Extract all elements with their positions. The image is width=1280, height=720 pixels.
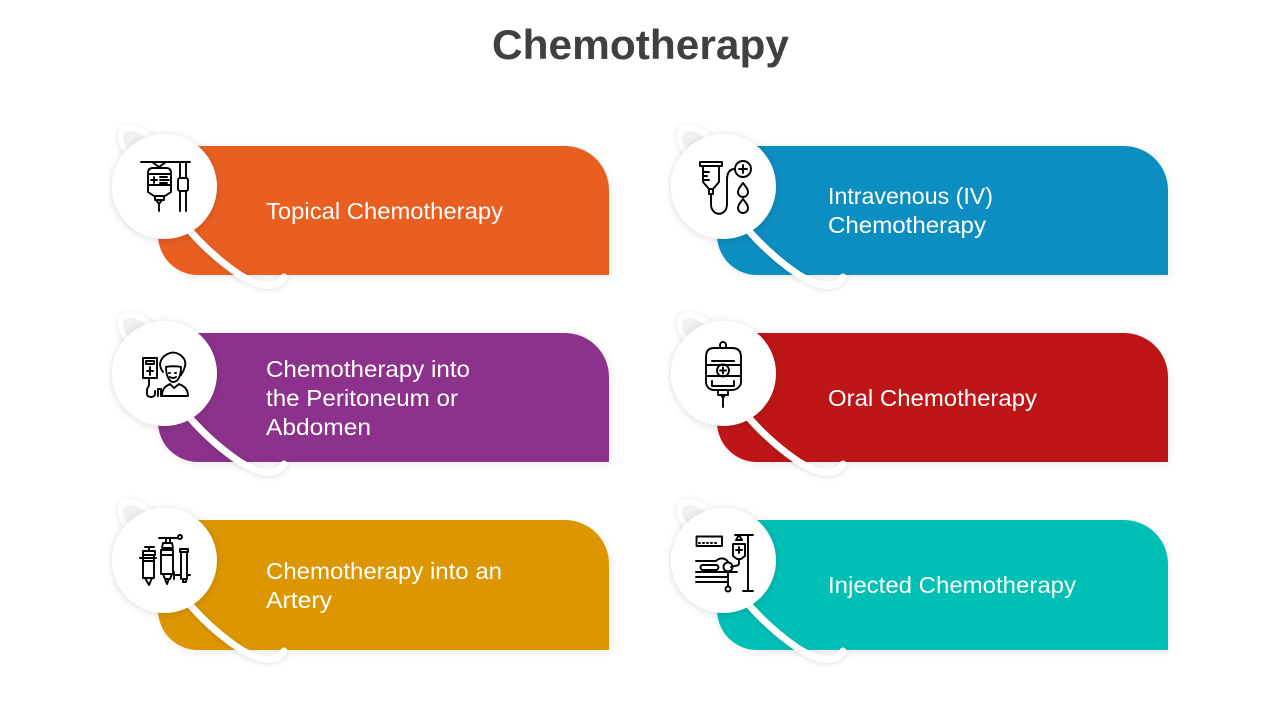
card background: amber: [158, 520, 609, 650]
icon circle: [671, 134, 776, 239]
icon: patient in bed with iv: [696, 535, 753, 592]
card background: orange: [158, 146, 609, 275]
label: Topical Chemotherapy: [266, 198, 504, 224]
label: [828, 183, 993, 238]
swoosh ribbon: [118, 312, 284, 472]
label: Chemotherapy into: [266, 356, 470, 382]
label: Artery: [266, 587, 333, 613]
title: Chemotherapy: [492, 21, 790, 68]
label: Injected Chemotherapy: [828, 572, 1077, 598]
icon: patient with infusion pump: [143, 353, 188, 397]
icon circle: [112, 508, 217, 613]
swoosh ribbon: [677, 125, 843, 285]
panel: intravenous chemotherapy: [671, 125, 1168, 285]
label: Oral Chemotherapy: [828, 385, 1038, 411]
label: [266, 558, 502, 613]
card background: purple: [158, 333, 609, 462]
icon circle: [671, 321, 776, 426]
label: Chemotherapy: [828, 212, 987, 238]
label: Chemotherapy into an: [266, 558, 502, 584]
label: Intravenous (IV): [828, 183, 993, 209]
card background: blue: [717, 146, 1168, 275]
panel: into an artery: [112, 499, 609, 659]
label: [266, 356, 470, 440]
panel: topical chemotherapy: [112, 125, 609, 285]
label: Abdomen: [266, 414, 371, 440]
icon: iv bag and tube: [141, 162, 190, 211]
card background: red: [717, 333, 1168, 462]
swoosh ribbon: [118, 499, 284, 659]
icon circle: [112, 134, 217, 239]
icon circle: [671, 508, 776, 613]
icon: medicine bag: [706, 342, 741, 407]
card background: teal: [717, 520, 1168, 650]
swoosh ribbon: [677, 312, 843, 472]
panel: injected chemotherapy: [671, 499, 1168, 659]
panel: oral chemotherapy: [671, 312, 1168, 472]
icon: syringes and filters: [140, 535, 190, 585]
label: the Peritoneum or: [266, 385, 458, 411]
icon circle: [112, 321, 217, 426]
swoosh ribbon: [118, 125, 284, 285]
swoosh ribbon: [677, 499, 843, 659]
panel: peritoneum or abdomen: [112, 312, 609, 472]
icon: infusion bag with drops: [700, 161, 751, 214]
